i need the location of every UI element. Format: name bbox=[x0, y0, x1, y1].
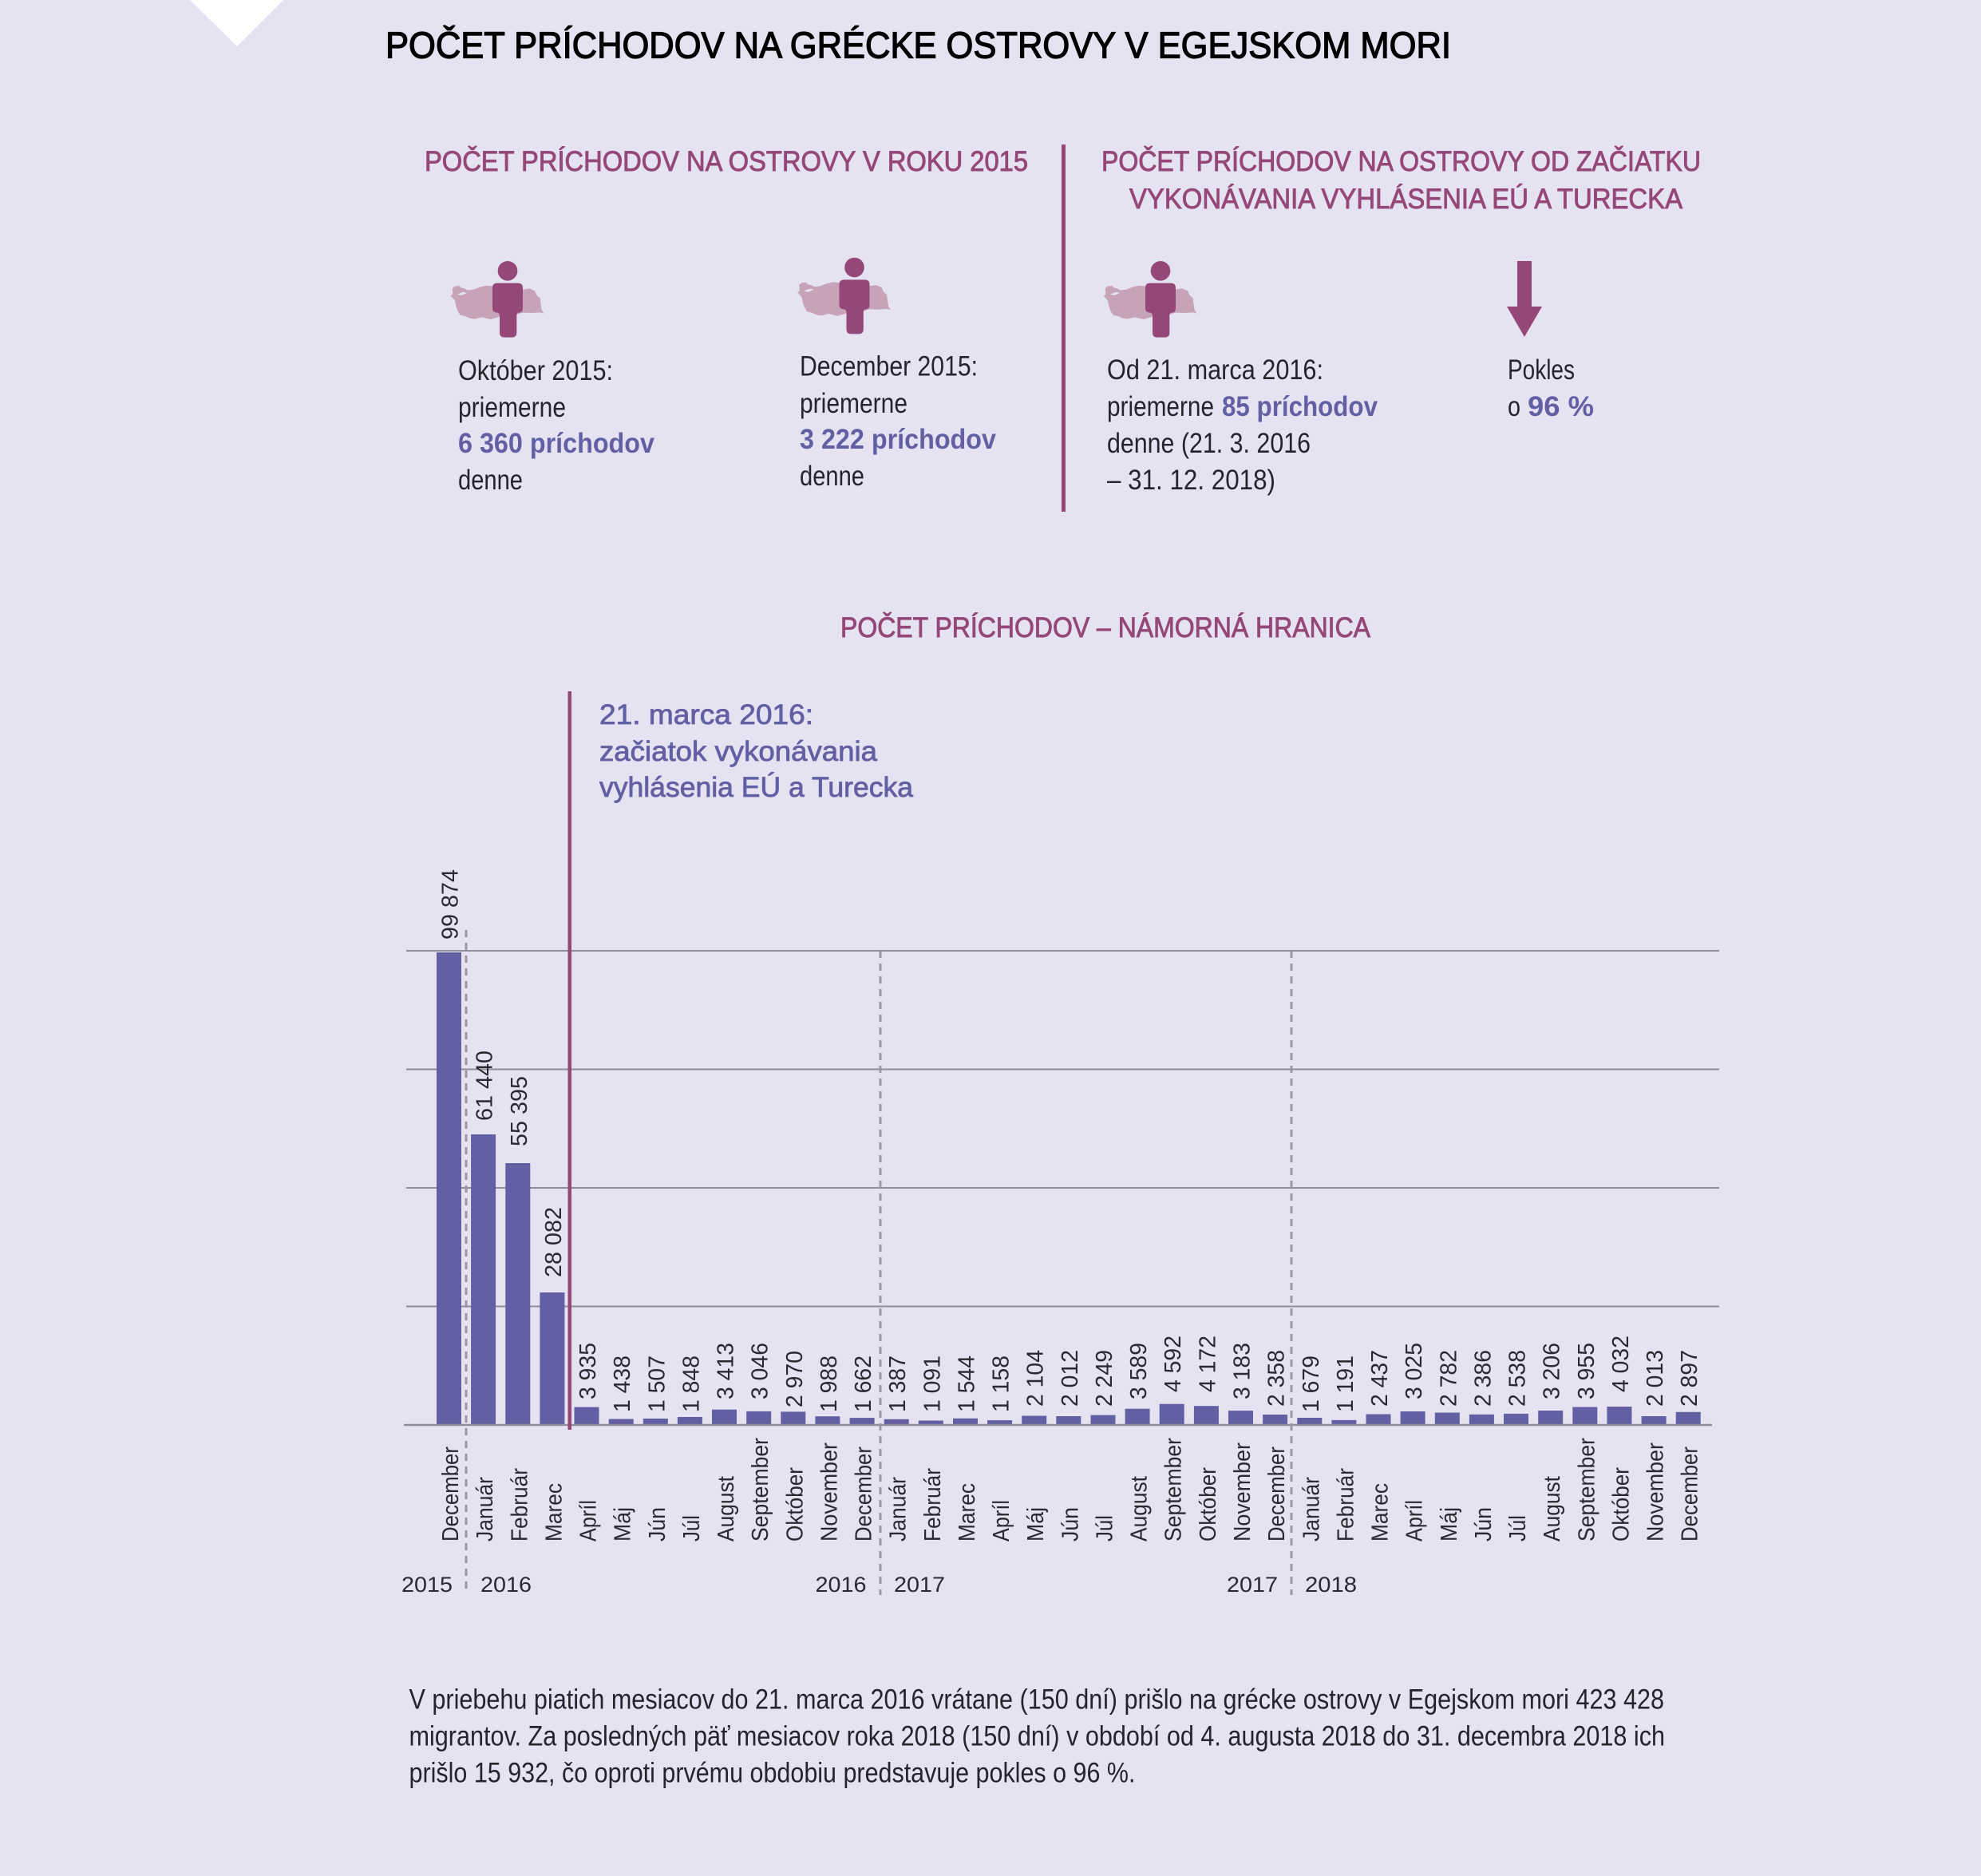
month labels: Február bbox=[1333, 1468, 1358, 1542]
bar chart: monthly arrivals bbox=[401, 691, 1719, 1597]
month labels bbox=[438, 1438, 1703, 1542]
month labels: Marec bbox=[955, 1483, 980, 1542]
month labels: Marec bbox=[1368, 1483, 1394, 1542]
icon: down arrow bbox=[1507, 261, 1542, 337]
value labels: 28 082 bbox=[541, 1207, 567, 1277]
value labels: 2 012 bbox=[1058, 1350, 1083, 1407]
value labels: 2 782 bbox=[1436, 1350, 1461, 1407]
month labels: November bbox=[1643, 1443, 1669, 1542]
year labels: 2016 bbox=[480, 1573, 532, 1597]
month labels: Október bbox=[1608, 1467, 1634, 1542]
text: decrease: o bbox=[1508, 391, 1520, 422]
callout: start of EU-Turkey statement: vyhlásenia EÚ a Turecka bbox=[599, 772, 914, 803]
value labels: 1 091 bbox=[919, 1356, 945, 1412]
icon: person over Turkey map bbox=[451, 261, 544, 338]
month labels: November bbox=[817, 1443, 842, 1542]
year labels: 2015 bbox=[401, 1573, 453, 1597]
value labels: 3 025 bbox=[1402, 1343, 1427, 1399]
year labels bbox=[401, 1573, 1357, 1597]
text: average since 21 March 2016 bbox=[1107, 354, 1378, 496]
month labels: Jún bbox=[1471, 1507, 1497, 1542]
text: October 2015 average: 6 360 príchodov bbox=[458, 428, 654, 459]
title: POČET PRÍCHODOV NA GRÉCKE OSTROVY V EGEJSKOM MORI bbox=[386, 24, 1451, 65]
value labels bbox=[437, 869, 1702, 1412]
month labels: Január bbox=[1299, 1477, 1324, 1542]
icon: person over Turkey map bbox=[1104, 261, 1197, 338]
month labels: Marec bbox=[541, 1483, 567, 1542]
value labels: 1 544 bbox=[955, 1356, 980, 1412]
text: October 2015 average bbox=[458, 355, 654, 496]
text: decrease: 96 % bbox=[1528, 391, 1594, 422]
text: October 2015 average: denne bbox=[458, 465, 523, 496]
value labels: 2 249 bbox=[1092, 1350, 1117, 1407]
text: average since 21 March 2016: 85 príchodov bbox=[1222, 391, 1378, 422]
panel: since 21 March 2016 bbox=[1104, 261, 1378, 496]
callout: start of EU-Turkey statement: 21. marca 2016: bbox=[599, 699, 813, 730]
value labels: 1 662 bbox=[851, 1356, 876, 1412]
value labels: 2 897 bbox=[1677, 1350, 1702, 1407]
text: average since 21 March 2016: denne (21. 3. 2016 bbox=[1107, 428, 1311, 459]
value labels: 3 413 bbox=[714, 1343, 739, 1399]
value labels: 3 955 bbox=[1574, 1343, 1599, 1399]
value labels: 1 679 bbox=[1299, 1356, 1324, 1412]
text: average since 21 March 2016: priemerne bbox=[1107, 391, 1214, 422]
value labels: 3 206 bbox=[1540, 1343, 1565, 1399]
text: average since 21 March 2016: – 31. 12. 2018) bbox=[1107, 465, 1275, 496]
value labels: 1 988 bbox=[817, 1356, 842, 1412]
heading: arrivals since the EU-Turkey statement: POČET PRÍCHODOV NA OSTROVY OD ZAČIATKU bbox=[1101, 146, 1701, 177]
value labels: 55 395 bbox=[507, 1076, 532, 1146]
bars bbox=[437, 952, 1701, 1426]
value labels: 2 437 bbox=[1367, 1350, 1393, 1407]
marker line: 21 March 2016 bbox=[568, 691, 571, 1430]
decorative white notch bbox=[190, 0, 283, 46]
month labels: December bbox=[852, 1447, 877, 1542]
panel: October 2015 bbox=[451, 261, 654, 496]
text: December 2015 average: 3 222 príchodov bbox=[800, 424, 996, 455]
month labels: December bbox=[1678, 1447, 1703, 1542]
month labels: September bbox=[1161, 1438, 1187, 1542]
month labels: August bbox=[1540, 1476, 1565, 1542]
text block: summary paragraph: V priebehu piatich mesiacov do 21. marca 2016 vrátane (150 dní) prišlo na grécke ostrovy v Egejskom mori 423 428 bbox=[409, 1684, 1664, 1716]
text: December 2015 average: priemerne bbox=[800, 388, 907, 419]
month labels: Máj bbox=[1437, 1507, 1462, 1542]
month labels: Október bbox=[782, 1467, 808, 1542]
text block: summary paragraph: migrantov. Za posledných päť mesiacov roka 2018 (150 dní) v období od 4. augusta 2018 do 31. decembra 2018 ich bbox=[409, 1721, 1665, 1752]
value labels: 1 191 bbox=[1333, 1356, 1358, 1412]
text block: summary paragraph bbox=[409, 1684, 1665, 1789]
heading: arrivals in 2015: POČET PRÍCHODOV NA OSTROVY V ROKU 2015 bbox=[425, 146, 1028, 177]
value labels: 2 970 bbox=[782, 1351, 808, 1407]
month labels: Jún bbox=[645, 1507, 670, 1542]
value labels: 3 589 bbox=[1126, 1343, 1152, 1399]
year labels: 2016 bbox=[816, 1573, 867, 1597]
value labels: 1 848 bbox=[678, 1356, 704, 1412]
value labels: 1 158 bbox=[989, 1356, 1014, 1412]
month labels: August bbox=[714, 1476, 739, 1542]
month labels: December bbox=[438, 1447, 464, 1542]
month labels: Apríl bbox=[989, 1500, 1014, 1542]
year labels: 2017 bbox=[1227, 1573, 1278, 1597]
value labels: 2 386 bbox=[1470, 1350, 1496, 1407]
month labels: Apríl bbox=[576, 1500, 602, 1542]
value labels: 1 507 bbox=[644, 1356, 670, 1412]
value labels: 2 358 bbox=[1264, 1350, 1290, 1407]
month labels: Júl bbox=[1092, 1515, 1117, 1542]
value labels: 1 438 bbox=[610, 1356, 635, 1412]
callout: start of EU-Turkey statement: začiatok vykonávania bbox=[599, 736, 878, 767]
month labels: Október bbox=[1196, 1467, 1221, 1542]
text: decrease: Pokles bbox=[1508, 354, 1575, 386]
month labels: Máj bbox=[611, 1507, 636, 1542]
month labels: September bbox=[748, 1438, 773, 1542]
callout: start of EU-Turkey statement bbox=[599, 699, 914, 803]
text: October 2015 average: priemerne bbox=[458, 392, 566, 423]
text: decrease bbox=[1508, 354, 1594, 422]
value labels: 4 032 bbox=[1608, 1336, 1634, 1392]
text: average since 21 March 2016: Od 21. marca 2016: bbox=[1107, 354, 1323, 386]
month labels: November bbox=[1230, 1443, 1255, 1542]
year labels: 2018 bbox=[1305, 1573, 1357, 1597]
value labels: 99 874 bbox=[437, 869, 463, 940]
value labels: 2 104 bbox=[1023, 1350, 1049, 1407]
month labels: August bbox=[1127, 1476, 1153, 1542]
value labels: 4 592 bbox=[1161, 1336, 1186, 1392]
heading: arrivals since the EU-Turkey statement bbox=[1101, 146, 1701, 215]
heading: arrivals since the EU-Turkey statement: VYKONÁVANIA VYHLÁSENIA EÚ A TURECKA bbox=[1129, 184, 1683, 215]
month labels: Máj bbox=[1023, 1507, 1049, 1542]
icon: person over Turkey map bbox=[797, 258, 891, 334]
month labels: September bbox=[1574, 1438, 1599, 1542]
value labels: 61 440 bbox=[473, 1051, 498, 1121]
month labels: Júl bbox=[1505, 1515, 1531, 1542]
value labels: 3 046 bbox=[748, 1343, 773, 1399]
value labels: 2 013 bbox=[1643, 1350, 1668, 1407]
text block: summary paragraph: prišlo 15 932, čo oproti prvému obdobiu predstavuje pokles o 96 %. bbox=[409, 1758, 1135, 1789]
value labels: 4 172 bbox=[1195, 1336, 1220, 1392]
heading: chart title: POČET PRÍCHODOV – NÁMORNÁ HRANICA bbox=[840, 612, 1371, 643]
panel: decrease of 96 % bbox=[1507, 261, 1594, 422]
month labels: Február bbox=[920, 1468, 946, 1542]
year labels: 2017 bbox=[894, 1573, 945, 1597]
month labels: December bbox=[1264, 1447, 1290, 1542]
month labels: Jún bbox=[1058, 1507, 1083, 1542]
month labels: Júl bbox=[679, 1515, 705, 1542]
text: December 2015 average: December 2015: bbox=[800, 351, 978, 382]
month labels: Apríl bbox=[1402, 1500, 1428, 1542]
text: December 2015 average bbox=[800, 351, 996, 492]
value labels: 3 935 bbox=[575, 1343, 601, 1399]
text: October 2015 average: Október 2015: bbox=[458, 355, 613, 386]
vertical divider between panels bbox=[1062, 144, 1066, 512]
value labels: 2 538 bbox=[1505, 1350, 1531, 1407]
panel: December 2015 bbox=[797, 258, 996, 492]
value labels: 1 387 bbox=[885, 1356, 911, 1412]
text: December 2015 average: denne bbox=[800, 461, 864, 492]
month labels: Január bbox=[473, 1477, 498, 1542]
month labels: Február bbox=[507, 1468, 532, 1542]
value labels: 3 183 bbox=[1229, 1343, 1255, 1399]
month labels: Január bbox=[886, 1477, 911, 1542]
